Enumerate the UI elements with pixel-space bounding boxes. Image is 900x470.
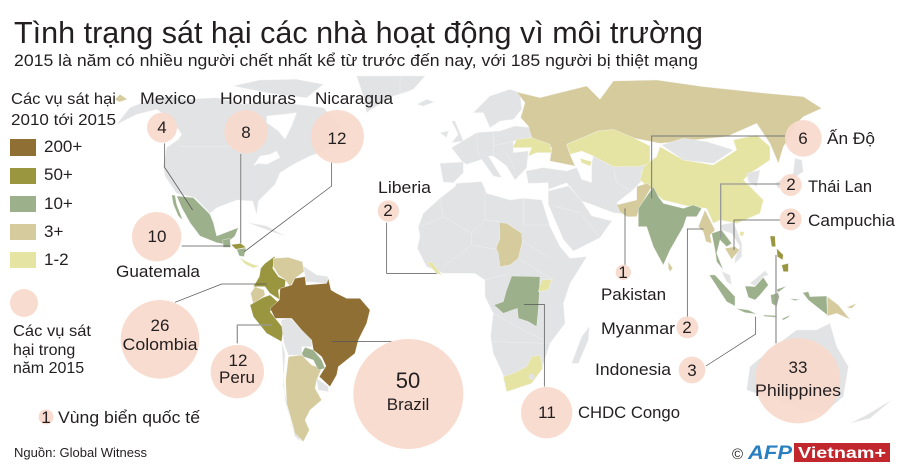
Guatemala label <box>116 227 201 281</box>
leader lines: Asia and Africa <box>524 136 785 387</box>
Thailand label <box>786 175 872 196</box>
India label: 6 <box>798 129 808 148</box>
Malaysia <box>722 272 732 285</box>
legend: killings in 2015 <box>10 289 92 377</box>
Philippines label: 33 <box>789 358 807 377</box>
Ecuador <box>251 287 265 304</box>
bubble DR Congo <box>521 387 572 438</box>
Cambodia label: 2 <box>786 209 796 228</box>
Mexico label: 4 <box>157 118 167 137</box>
Mexico leader <box>165 143 193 210</box>
swatch 3+ <box>10 224 36 240</box>
copyright mark: © <box>732 446 743 463</box>
Honduras label <box>220 89 296 142</box>
Philippines south <box>782 263 788 272</box>
Myanmar label: 2 <box>682 318 692 337</box>
Thailand <box>712 230 732 270</box>
New Britain <box>847 303 857 308</box>
bubble Myanmar <box>676 316 698 338</box>
Georgia <box>580 158 592 166</box>
Liberia label: Liberia <box>378 178 432 197</box>
South Africa <box>503 355 543 392</box>
legend bubble text: hại trong <box>13 342 75 359</box>
Nicaragua <box>237 248 246 257</box>
bubble Cambodia <box>780 208 802 230</box>
international waters number: 1 <box>41 408 51 427</box>
Baja California <box>172 195 183 220</box>
Costa Rica and Panama <box>239 257 259 268</box>
Honduras label: Honduras <box>220 89 296 108</box>
Canada and USA <box>117 96 343 214</box>
Cuba <box>248 223 285 236</box>
Brazil label: 50 <box>396 368 420 393</box>
Philippines north <box>770 236 776 247</box>
bubbles: Asia and Africa <box>521 120 840 438</box>
Greenland <box>357 76 410 113</box>
bubble Honduras <box>224 110 268 153</box>
Uruguay <box>317 378 328 392</box>
Laos and Vietnam <box>720 223 742 263</box>
Paraguay <box>302 347 325 370</box>
North Borneo <box>750 271 768 286</box>
Brazil label: Brazil <box>387 395 429 414</box>
logo: AFP Vietnam+ <box>732 443 890 464</box>
Guatemala label: 10 <box>148 227 166 246</box>
Arabia and Levant <box>548 186 612 251</box>
Chile <box>282 342 302 442</box>
bubble Indonesia <box>679 357 705 383</box>
Russia <box>517 80 822 166</box>
Nicaragua label: 12 <box>328 129 346 148</box>
Sri Lanka <box>668 262 673 272</box>
international waters bubble <box>38 410 54 424</box>
Colombia label: Colombia <box>122 335 198 354</box>
Venezuela <box>273 257 304 287</box>
Cambodia leader <box>734 220 780 250</box>
swatch 10+ <box>10 196 36 212</box>
bubble Thailand <box>780 174 802 196</box>
Pakistan leader <box>624 208 626 265</box>
legend bubble text: Các vụ sát <box>13 323 92 340</box>
red logo box <box>794 443 890 462</box>
Alaska fragment <box>115 94 127 102</box>
African borders <box>420 187 553 343</box>
bubble Brazil <box>353 339 463 449</box>
DR Congo label: 11 <box>538 403 556 422</box>
Japan <box>775 158 803 188</box>
map: South-East Asia <box>668 210 857 320</box>
Guatemala leader <box>182 245 230 247</box>
swatch 1-2 <box>10 252 36 268</box>
India label: Ấn Độ <box>827 129 875 148</box>
Guianas <box>303 266 328 283</box>
Nicaragua label: Nicaragua <box>315 89 394 108</box>
Mexico <box>177 196 238 244</box>
China <box>640 135 770 223</box>
Philippines leader <box>774 255 778 343</box>
United Kingdom <box>452 121 463 143</box>
Cambodia <box>725 247 739 259</box>
Liberia label: 2 <box>383 201 393 220</box>
Peru label: Peru <box>219 368 255 387</box>
DR Congo label: CHDC Congo <box>578 403 680 422</box>
Java <box>736 308 757 314</box>
Greenland tip <box>400 76 425 93</box>
Myanmar label: Myanmar <box>601 319 675 338</box>
label 200+: 200+ <box>44 137 82 156</box>
Pakistan label <box>601 263 666 304</box>
Hainan <box>740 232 744 236</box>
Colombia <box>253 256 286 299</box>
map: Europe and Middle East <box>400 76 650 251</box>
legend bubble <box>10 289 38 317</box>
swatch 200+ <box>10 139 36 156</box>
Lesotho <box>529 374 535 380</box>
European borders <box>477 131 515 169</box>
Mexico label: Mexico <box>140 89 196 108</box>
Kazakhstan <box>567 129 650 167</box>
Madagascar <box>572 327 589 363</box>
Peru leader <box>237 325 272 343</box>
Timor <box>782 315 790 320</box>
Argentina <box>286 355 322 442</box>
AFP wordmark: AFP <box>747 443 792 464</box>
Nicaragua leader <box>244 163 332 252</box>
leader lines: Americas <box>165 143 437 343</box>
New Zealand <box>850 400 892 423</box>
DR Congo <box>494 276 540 327</box>
Korea <box>747 170 760 187</box>
Nicaragua label <box>315 89 394 148</box>
Vietnam+ wordmark: Vietnam+ <box>798 445 886 462</box>
Iceland <box>417 99 434 106</box>
Guatemala and Belize <box>223 238 231 247</box>
Peru label: 12 <box>229 351 247 370</box>
Indonesia label: 3 <box>687 361 697 380</box>
Philippines label <box>755 358 841 400</box>
international waters label: Vùng biển quốc tế <box>58 408 201 427</box>
legend: international waters <box>38 408 201 427</box>
Brazil leader <box>332 341 392 343</box>
Sulawesi <box>771 286 787 307</box>
source: Nguồn: Global Witness <box>14 445 147 460</box>
bubble Mexico <box>147 113 177 143</box>
Myanmar leader <box>687 229 703 318</box>
Lesser Sunda islands <box>763 315 777 317</box>
bubble Philippines <box>755 338 840 423</box>
map: Central and South America <box>223 238 370 442</box>
Indonesia label: Indonesia <box>595 360 672 379</box>
Mexico label <box>140 89 196 137</box>
map: North America <box>115 76 410 244</box>
label 50+: 50+ <box>44 165 73 184</box>
swatch 50+ <box>10 168 36 184</box>
bubble Peru <box>211 345 264 398</box>
Indonesia label <box>595 360 697 380</box>
Colombia label: 26 <box>151 316 169 335</box>
Papua New Guinea <box>827 297 850 319</box>
Mongolia <box>662 138 733 163</box>
India leader <box>652 136 785 198</box>
Australia <box>747 323 848 413</box>
Honduras <box>231 243 246 249</box>
bubble Pakistan <box>616 265 631 280</box>
DR Congo leader <box>524 304 544 387</box>
map: Asia <box>513 80 892 423</box>
label 10+: 10+ <box>44 194 73 213</box>
India <box>638 187 702 265</box>
Arctic islands <box>233 79 323 98</box>
bubble Liberia <box>378 200 399 222</box>
Papua <box>803 292 827 315</box>
subtitle: 2015 là năm có nhiều người chết nhất kể từ trước đến nay, với 185 người bị thiệt mạng <box>14 51 698 70</box>
Honduras leader <box>239 154 243 243</box>
bubble Nicaragua <box>311 110 364 163</box>
bubble India <box>785 120 822 157</box>
Scandinavia <box>473 89 522 128</box>
Liberia label <box>378 178 432 220</box>
Maluku <box>789 299 800 301</box>
label 1-2: 1-2 <box>44 250 69 269</box>
map: Africa <box>417 182 589 392</box>
Myanmar <box>698 210 715 243</box>
US-Canada border <box>180 146 240 148</box>
Chad <box>496 222 522 267</box>
legend heading: Các vụ sát hại <box>11 91 116 108</box>
legend heading: 2010 tới 2015 <box>11 112 116 129</box>
title: Tình trạng sát hại các nhà hoạt động vì môi trường <box>14 15 703 50</box>
Philippines centre <box>777 248 783 260</box>
Guatemala label: Guatemala <box>116 262 201 281</box>
legend bubble text: năm 2015 <box>13 360 84 377</box>
Thailand leader <box>721 184 780 238</box>
Sumatra <box>709 275 735 306</box>
Colombia label <box>122 316 198 354</box>
Bolivia <box>281 318 312 355</box>
bubbles: Americas <box>121 110 463 449</box>
Liberia <box>427 262 442 275</box>
India label <box>798 129 875 148</box>
Hudson Bay <box>267 113 297 139</box>
Turkey, Iran, Central Asia <box>526 156 650 214</box>
Indonesian Borneo <box>745 277 768 300</box>
Liberia leader <box>387 223 437 273</box>
African continent <box>417 182 587 392</box>
Iberia <box>440 162 463 183</box>
Philippines label: Philippines <box>755 381 841 400</box>
Thailand label: 2 <box>786 175 796 194</box>
Brazil label <box>387 368 429 414</box>
Ukraine <box>513 138 552 156</box>
Honduras label: 8 <box>241 123 251 142</box>
Pakistan <box>617 183 652 217</box>
bubble Guatemala <box>132 212 181 261</box>
Cambodia label: Campuchia <box>808 211 896 230</box>
Uganda <box>538 279 552 292</box>
Brazil <box>270 277 370 387</box>
Thailand label: Thái Lan <box>808 177 872 196</box>
Middle East borders <box>553 167 632 238</box>
Ireland <box>440 131 448 138</box>
Pakistan label: Pakistan <box>601 285 666 304</box>
Peru label <box>219 351 255 387</box>
Pakistan label: 1 <box>618 263 628 282</box>
label 3+: 3+ <box>44 222 63 241</box>
legend: killings 2010 to 2015 <box>10 91 116 269</box>
bubble Colombia <box>121 300 199 379</box>
Indonesia leader <box>706 317 756 366</box>
Great Lakes <box>253 151 280 166</box>
Colombia leader <box>175 284 267 302</box>
Peru <box>250 295 283 342</box>
Continental Europe <box>452 126 532 180</box>
